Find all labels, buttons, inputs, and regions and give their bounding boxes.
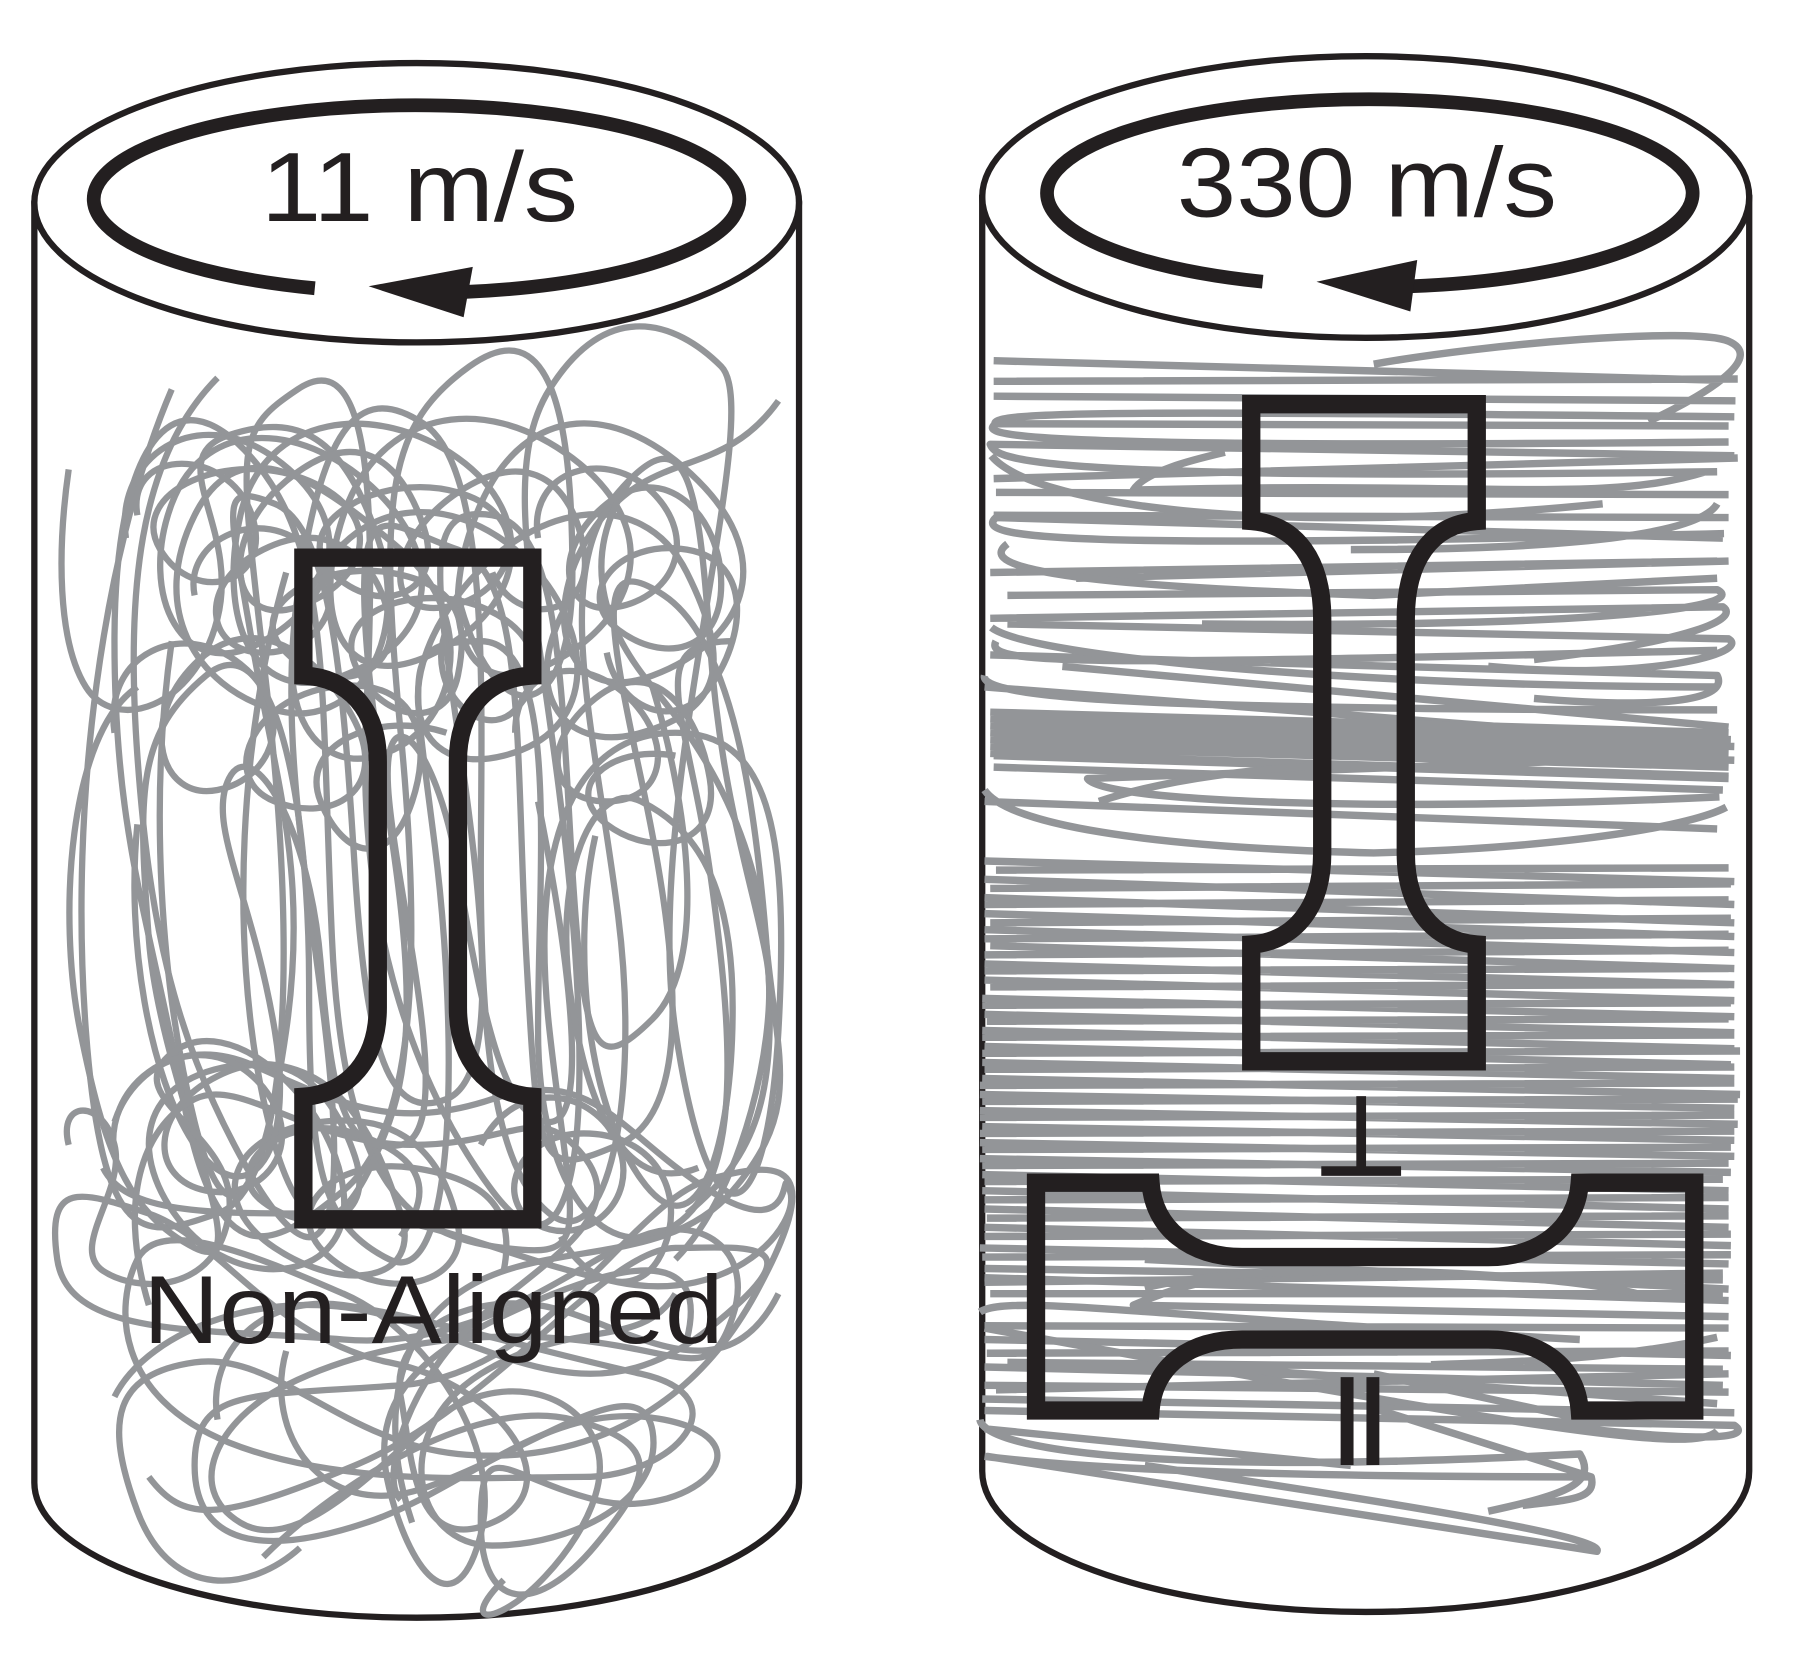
panel: right cylinder, 330 m/s aligned <box>980 56 1749 1612</box>
label: non-aligned: Non-Aligned <box>143 1257 723 1364</box>
aligned fibers <box>980 336 1740 1551</box>
panel: left cylinder, 11 m/s non-aligned <box>34 63 799 1618</box>
speed label: 330 m/s <box>1177 127 1557 237</box>
symbol: parallel: ∥ <box>1319 1364 1401 1467</box>
random fibers <box>55 326 792 1615</box>
speed label: 11 m/s <box>261 132 578 242</box>
specimen outline: perpendicular <box>1251 404 1477 1061</box>
cylinder outline <box>34 63 799 1618</box>
specimen outline <box>303 558 532 1219</box>
rotation arrow <box>94 105 739 317</box>
symbol: perpendicular: ⊥ <box>1313 1073 1409 1201</box>
specimen outline: parallel <box>1036 1183 1694 1410</box>
cylinder outline <box>982 56 1749 1612</box>
rotation arrow <box>1047 99 1693 311</box>
